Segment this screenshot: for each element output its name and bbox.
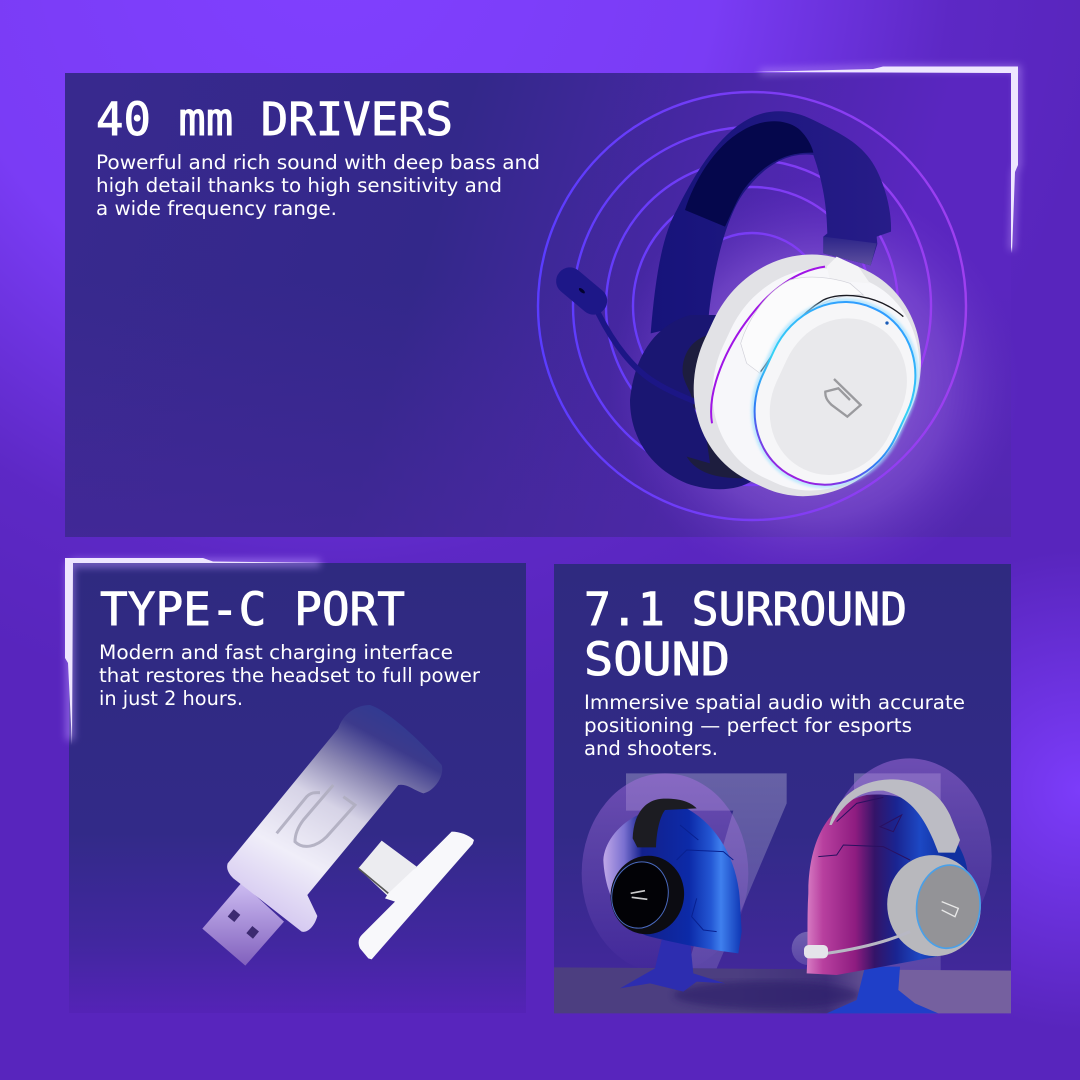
back cushion bbox=[683, 335, 743, 478]
left stand bbox=[620, 940, 725, 992]
description: Modern and fast charging interface bbox=[99, 641, 453, 664]
panel background bbox=[65, 73, 1011, 537]
corner highlight bbox=[753, 66, 1018, 253]
panel: 7.1 surround sound bbox=[554, 564, 1011, 1013]
description: Powerful and rich sound with deep bass and bbox=[96, 151, 540, 174]
concentric sound rings bbox=[538, 92, 966, 520]
description bbox=[584, 691, 965, 760]
left dome seams bbox=[677, 825, 733, 932]
description: in just 2 hours. bbox=[99, 687, 243, 710]
LED ring bbox=[729, 278, 941, 509]
white ear shell bbox=[680, 237, 952, 521]
heading: SOUND bbox=[584, 633, 730, 686]
floor shadow bbox=[673, 981, 860, 1009]
left dome head bbox=[603, 806, 742, 953]
LED ring glow bbox=[729, 278, 941, 509]
floor bbox=[554, 967, 1011, 1013]
microphone boom bbox=[598, 313, 695, 402]
right stand bbox=[827, 967, 938, 1013]
Type-C bar bbox=[359, 832, 474, 959]
right dome head bbox=[807, 794, 969, 975]
heading bbox=[584, 583, 907, 686]
glow behind headset bbox=[610, 180, 1020, 590]
description: positioning — perfect for esports bbox=[584, 714, 912, 737]
band padding bbox=[685, 121, 813, 227]
yoke bbox=[823, 237, 877, 265]
description: and shooters. bbox=[584, 737, 718, 760]
backdrop 7.1 shape bbox=[626, 773, 941, 971]
stands photo illustration bbox=[554, 758, 1011, 1013]
headband bbox=[651, 111, 891, 333]
description: that restores the headset to full power bbox=[99, 664, 481, 687]
panel background bbox=[69, 563, 526, 1013]
USB connector bbox=[202, 883, 284, 966]
Type-C plug bbox=[358, 841, 417, 897]
heading: 40 mm DRIVERS bbox=[96, 93, 453, 146]
backdrop circles bbox=[582, 758, 992, 973]
headset illustration bbox=[551, 111, 956, 530]
top hinge bbox=[827, 257, 870, 283]
USB dongle illustration bbox=[202, 705, 474, 966]
back ear cup bbox=[630, 315, 753, 489]
dongle body bbox=[227, 705, 442, 932]
description bbox=[96, 151, 540, 220]
left headset bbox=[603, 799, 697, 941]
white ear cushion bbox=[658, 221, 956, 530]
right headset bbox=[804, 779, 989, 964]
heading: 7.1 SURROUND bbox=[584, 583, 907, 636]
status dot bbox=[885, 321, 889, 325]
right dome seams bbox=[818, 797, 910, 860]
description bbox=[99, 641, 481, 710]
heading: TYPE-C PORT bbox=[100, 583, 405, 636]
dongle logo bbox=[277, 785, 355, 846]
purple side light bbox=[711, 267, 825, 423]
description: Immersive spatial audio with accurate bbox=[584, 691, 965, 714]
description: a wide frequency range. bbox=[96, 197, 337, 220]
logo bbox=[825, 379, 861, 417]
description: high detail thanks to high sensitivity and bbox=[96, 174, 502, 197]
panel: 40 mm drivers bbox=[65, 66, 1020, 590]
panel background bbox=[554, 564, 1011, 1013]
panel: Type-C port bbox=[65, 558, 526, 1013]
inner plate bbox=[748, 298, 929, 496]
connector holes bbox=[228, 909, 259, 939]
side cutout bbox=[741, 277, 863, 373]
black shell seam bbox=[761, 295, 903, 372]
microphone head bbox=[551, 262, 613, 320]
corner highlight bbox=[65, 558, 330, 745]
